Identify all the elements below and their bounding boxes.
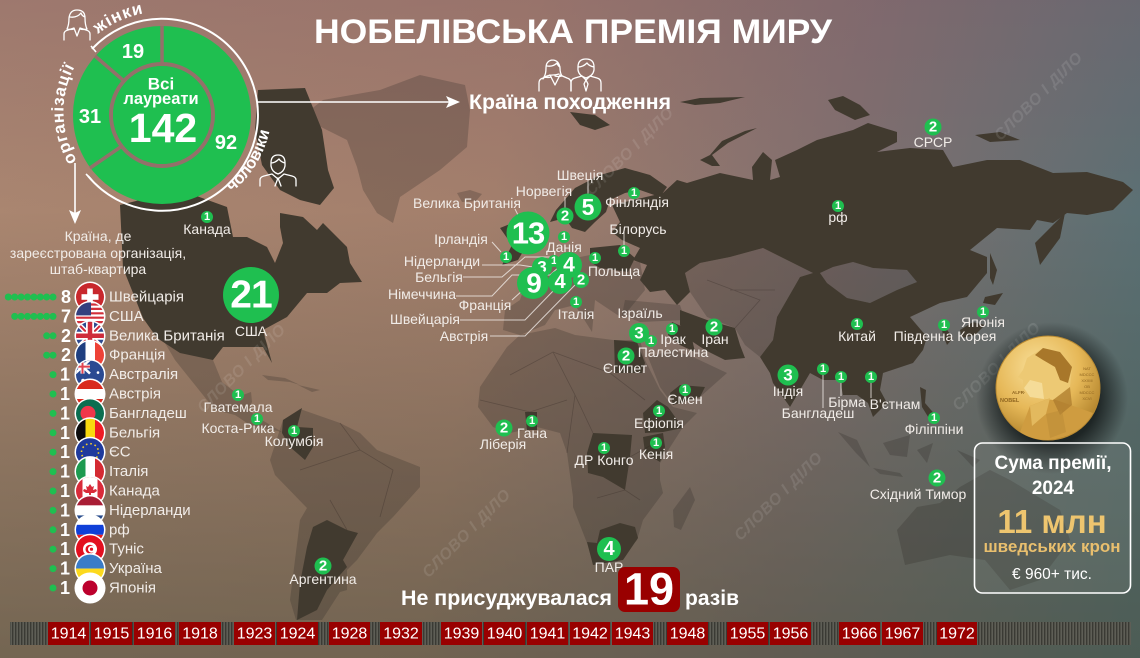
marker: Гватемала [204,389,273,415]
marker: Німеччина: Німеччина [388,286,456,302]
marker: Швеція: Швеція [557,167,603,183]
icon: woman [64,10,90,40]
marker: ПАР [595,537,623,575]
marker: Південна Корея [894,319,996,344]
marker: Данія [546,231,582,255]
marker: Іран: 2 [710,318,718,336]
marker: Ірак: Ірак [660,331,687,347]
prize heading [994,453,1112,499]
marker: Китай: Китай [838,328,876,344]
marker: Гана: 1 [529,415,535,427]
marker: Ізраїль: Ізраїль [617,305,663,321]
row: Австрія: Австрія [109,386,161,402]
marker: Бірма: Бірма [828,394,866,410]
marker: В'єтнам: В'єтнам [870,396,920,412]
marker: В'єтнам [865,371,920,412]
marker: Канада: 1 [204,211,210,223]
marker: Швейцарія: Швейцарія [390,311,460,327]
icon: man [260,155,296,186]
marker: Польща: Польща [588,263,640,279]
row: Туніс [50,534,144,559]
row: Канада: Канада [109,482,160,500]
marker: Колумбія [265,425,323,449]
marker: Кенія: Кенія [639,446,673,462]
marker: Аргентина: 2 [319,558,327,574]
marker: Кенія [639,437,673,462]
marker: Східний Тимор: 2 [933,470,941,486]
marker: Білорусь: 1 [621,245,627,257]
donut centre label [123,74,199,151]
prize amount value: 11 млн [997,503,1107,540]
row: Австрія: 1 [60,384,70,404]
text: country of registration: Країна, де [65,228,132,244]
heading: country of origin: Країна походження [469,91,671,114]
marker: Ємен: 1 [682,384,688,396]
marker: Індія [773,364,803,399]
text: country of registration: штаб-квартира [50,261,146,277]
marker: Ліберія: 2 [500,420,508,436]
timeline: years without award: 1914 [51,626,86,642]
marker: Китай: 1 [854,318,860,330]
marker: В'єтнам: 1 [868,371,874,383]
marker: Іран [701,318,729,347]
marker: Німеччина: 4 [563,254,575,276]
marker: Ліберія: Ліберія [480,436,526,452]
marker: Японія [961,306,1005,330]
marker: Бірма: 1 [838,371,844,383]
row: рф: 1 [60,520,70,540]
marker: Індія: Індія [773,383,803,399]
marker: ПАР: 4 [603,538,615,560]
marker: Норвегія: Норвегія [516,183,572,199]
marker: Гватемала: 1 [235,389,241,401]
marker: Колумбія: 1 [291,425,297,437]
marker: Франція [459,267,549,313]
marker: Ємен: Ємен [667,391,703,407]
marker: Коста-Рика [201,413,275,436]
row: Італія [50,456,148,482]
row: ЄС: 1 [60,442,70,462]
curved label: organizations: організації [51,62,76,164]
marker: Філіппіни: 1 [931,412,937,424]
watermarks: СЛОВО І ДІЛО [991,49,1086,144]
marker: Ефіопія: 1 [656,405,662,417]
text: country of registration [10,228,186,277]
marker: Філіппіни: Філіппіни [905,421,963,437]
marker: Ефіопія: Ефіопія [634,415,684,431]
marker: Бангладеш: Бангладеш [782,405,854,421]
row: Швейцарія: 8 [61,287,71,307]
marker: Ірак: 1 [669,323,675,335]
timeline: years without award: 1967 [885,626,920,642]
prize heading: 2024 [1032,478,1075,499]
marker: Ліберія [480,420,526,452]
row: США [11,301,144,326]
timeline: years without award: 1955 [730,626,765,642]
row: Японія [50,572,156,604]
marker: Італія [558,296,594,322]
marker: Польща [588,252,640,279]
marker: Коста-Рика: 1 [254,413,260,425]
watermarks: СЛОВО І ДІЛО [949,319,1044,414]
timeline: years without award: 1923 [237,626,272,642]
marker: Ірландія: 1 [503,251,509,263]
timeline: years without award: 1928 [332,626,367,642]
donut chart: all laureates [51,4,270,212]
prize in euros: € 960+ тис. [1012,566,1092,583]
marker: Фінляндія: Фінляндія [605,194,669,210]
row: Велика Британія: 2 [61,326,71,346]
row: Бангладеш: 1 [60,403,70,423]
marker: Данія: Данія [546,239,582,255]
marker: Бангладеш: 1 [820,363,826,375]
marker: рф: 1 [835,200,841,212]
marker: Єгипет: Єгипет [603,360,648,376]
row: Австралія [50,360,178,384]
donut value: men: 92 [215,132,237,154]
marker: США: США [235,323,268,339]
marker: Білорусь: Білорусь [609,221,667,237]
row: Бангладеш [50,399,186,423]
row: Швейцарія [4,282,183,307]
not awarded caption: Не присуджувалася [401,586,612,610]
marker: Бельгія: Бельгія [415,269,463,285]
donut centre label: лауреати [123,90,199,108]
marker: Палестина [638,335,708,360]
row: Україна [50,553,162,578]
marker: Білорусь [609,221,667,257]
marker: Кенія: 1 [653,437,659,449]
marker: США: 21 [230,274,272,316]
watermarks: СЛОВО І ДІЛО [194,321,289,416]
marker: Норвегія [516,183,574,224]
marker: Австрія [440,272,589,344]
row: Швейцарія: Швейцарія [109,288,184,306]
row: ЄС: ЄС [109,444,131,461]
marker: Східний Тимор [870,470,967,502]
row: Туніс: Туніс [109,541,144,558]
Nobel medal: OB [1084,384,1090,389]
row: Канада [50,476,160,501]
marker: Індія: 3 [783,366,793,384]
Nobel medal [976,322,1128,474]
row: Канада: 1 [60,481,70,501]
marker: Китай [838,318,876,344]
Nobel medal: XCVI [1082,396,1092,401]
row: Австралія: Австралія [109,366,178,383]
marker: рф: рф [828,209,848,225]
marker: Польща: 1 [592,252,598,264]
title: НОБЕЛІВСЬКА ПРЕМІЯ МИРУ [314,13,833,51]
marker: Східний Тимор: Східний Тимор [870,486,967,502]
donut centre label: 142 [129,105,197,151]
timeline: years without award: 1918 [182,626,218,642]
marker: Швеція [557,167,603,220]
marker: ДР Конго [575,442,634,468]
arrow to registered countries [69,163,81,224]
marker: Італія: Італія [558,306,594,322]
marker: Бірма [828,371,866,410]
leader lines in Europe [456,180,871,408]
marker: Велика Британія [413,195,550,254]
marker: Філіппіни [905,412,963,437]
marker: Данія: 1 [561,231,567,243]
timeline: years without award: 1924 [280,626,315,642]
marker: Палестина: Палестина [638,344,708,360]
marker: Південна Корея: Південна Корея [894,328,996,344]
marker: Велика Британія: 13 [512,216,545,250]
timeline: years without award: 1915 [94,626,129,642]
marker: ДР Конго: ДР Конго [575,452,634,468]
marker: Швейцарія [390,270,572,327]
row: Австрія [50,378,160,404]
watermarks [194,49,1086,581]
watermarks: СЛОВО І ДІЛО [731,449,826,544]
timeline: years without award: 1943 [615,626,650,642]
prize currency: шведських крон [984,537,1120,556]
row: Японія: 1 [60,578,70,598]
marker: США [223,267,279,339]
marker: Бельгія [415,255,560,285]
row: Австралія: 1 [60,365,70,385]
marker: СРСР [914,118,952,150]
icon: woman and man laureates [539,59,601,91]
timeline: years without award: 1972 [939,626,975,642]
marker: Австрія: Австрія [440,328,488,344]
timeline: years without award: 1956 [773,626,808,642]
donut centre label: Всі [148,74,174,94]
marker: СРСР: СРСР [914,134,952,150]
marker: Фінляндія: 1 [631,187,637,199]
marker: Канада [183,211,231,237]
marker: Японія: Японія [961,314,1005,330]
marker: Японія: 1 [980,306,986,318]
marker: Швейцарія: 4 [554,271,566,293]
not awarded count: 19 [624,564,674,614]
row: Франція [43,340,164,365]
timeline: years without award: 1932 [383,626,419,642]
timeline: years without award: 1941 [530,626,565,642]
timeline: years without award: 1916 [137,626,172,642]
marker: Канада: Канада [183,221,231,237]
marker: Гватемала: Гватемала [204,399,273,415]
marker: Нідерланди: Нідерланди [404,253,480,269]
marker: ДР Конго: 1 [601,442,607,454]
marker: Німеччина [388,252,582,302]
marker: Ємен [667,384,703,407]
row: рф [50,515,130,540]
curved label: men: чоловіки [228,130,270,189]
row: Нідерланди [50,494,190,520]
marker: Бангладеш [782,363,854,421]
row: Нідерланди: 1 [60,500,70,520]
row: Італія: Італія [109,463,148,480]
marker: Ірак [660,323,687,347]
row: Бельгія: 1 [60,423,70,443]
marker: Колумбія: Колумбія [265,433,323,449]
row: Велика Британія [43,321,224,346]
marker: Ізраїль [617,305,663,343]
marker: Нідерланди [404,253,552,277]
marker: Франція: 9 [526,268,542,298]
marker: рф [828,200,848,225]
marker: Франція: Франція [459,297,511,313]
marker: Гана: Гана [517,425,547,441]
row: рф: рф [109,521,130,538]
marker: Ірландія [434,231,512,263]
watermarks: СЛОВО І ДІЛО [419,486,514,581]
row: ЄС [50,436,130,462]
marker: Норвегія: 2 [561,208,569,224]
marker: Палестина: 1 [648,335,654,347]
row: Україна: Україна [109,560,163,577]
row: Бельгія [50,417,160,442]
donut value: women: 19 [122,41,144,63]
row: Франція: 2 [61,345,71,365]
panel: prize amount [974,443,1130,593]
donut value: organizations: 31 [79,106,101,128]
row: Велика Британія: Велика Британія [109,327,225,344]
legend: organizations by country [5,282,225,604]
marker: СРСР: 2 [929,118,937,136]
marker: Коста-Рика: Коста-Рика [201,420,275,436]
prize heading: Сума премії, [994,453,1112,474]
Nobel medal: XXXIII [1081,378,1093,383]
marker: Швеція: 5 [582,194,595,220]
marker: Єгипет [603,348,648,376]
marker: Велика Британія: Велика Британія [413,195,521,211]
marker: Ізраїль: 3 [634,324,644,342]
Nobel medal: NOBEL [1000,398,1020,404]
not awarded caption: разів [685,586,739,610]
not awarded caption [401,564,739,614]
marker: Італія: 1 [573,296,579,308]
marker: Нідерланди: 3 [537,258,547,276]
marker: Ірландія: Ірландія [434,231,488,247]
row: Італія: 1 [60,462,70,482]
timeline: years without award: 1966 [842,626,877,642]
Nobel medal: ALFR· [1012,390,1026,395]
watermarks: СЛОВО І ДІЛО [582,104,677,199]
marker: Аргентина [289,558,357,587]
row: Бельгія: Бельгія [109,424,160,441]
timeline: years without award: 1948 [670,626,705,642]
Nobel medal: MDCCC [1080,372,1095,377]
timeline: years without award: 1940 [487,626,522,642]
row: США: США [109,308,144,325]
marker: Гана [517,415,547,441]
row: Японія: Японія [109,580,156,596]
timeline: years without award: 1939 [444,626,479,642]
marker: Фінляндія [605,187,669,210]
row: Нідерланди: Нідерланди [109,502,191,519]
marker: Бельгія: 1 [551,255,557,267]
marker: Ефіопія [634,405,684,431]
arrow to country of origin [257,96,460,108]
marker: Південна Корея: 1 [941,319,947,331]
marker: Аргентина: Аргентина [289,571,357,587]
world map [120,75,1133,620]
marker: ПАР: ПАР [595,559,623,575]
timeline: years without award [10,622,1131,645]
marker: Єгипет: 2 [622,348,630,364]
timeline: years without award: 1942 [572,626,608,642]
row: Бангладеш: Бангладеш [109,405,187,422]
row: Туніс: 1 [60,539,70,559]
Nobel medal: MDCCC [1080,390,1095,395]
text: country of registration: зареєстрована організація, [10,245,186,261]
row: Україна: 1 [60,559,70,579]
marker: Іран: Іран [701,331,729,347]
marker: Австрія: 2 [577,272,585,288]
row: Франція: Франція [109,347,165,364]
row: США: 7 [61,306,71,326]
Nobel medal: NAT [1083,366,1091,371]
